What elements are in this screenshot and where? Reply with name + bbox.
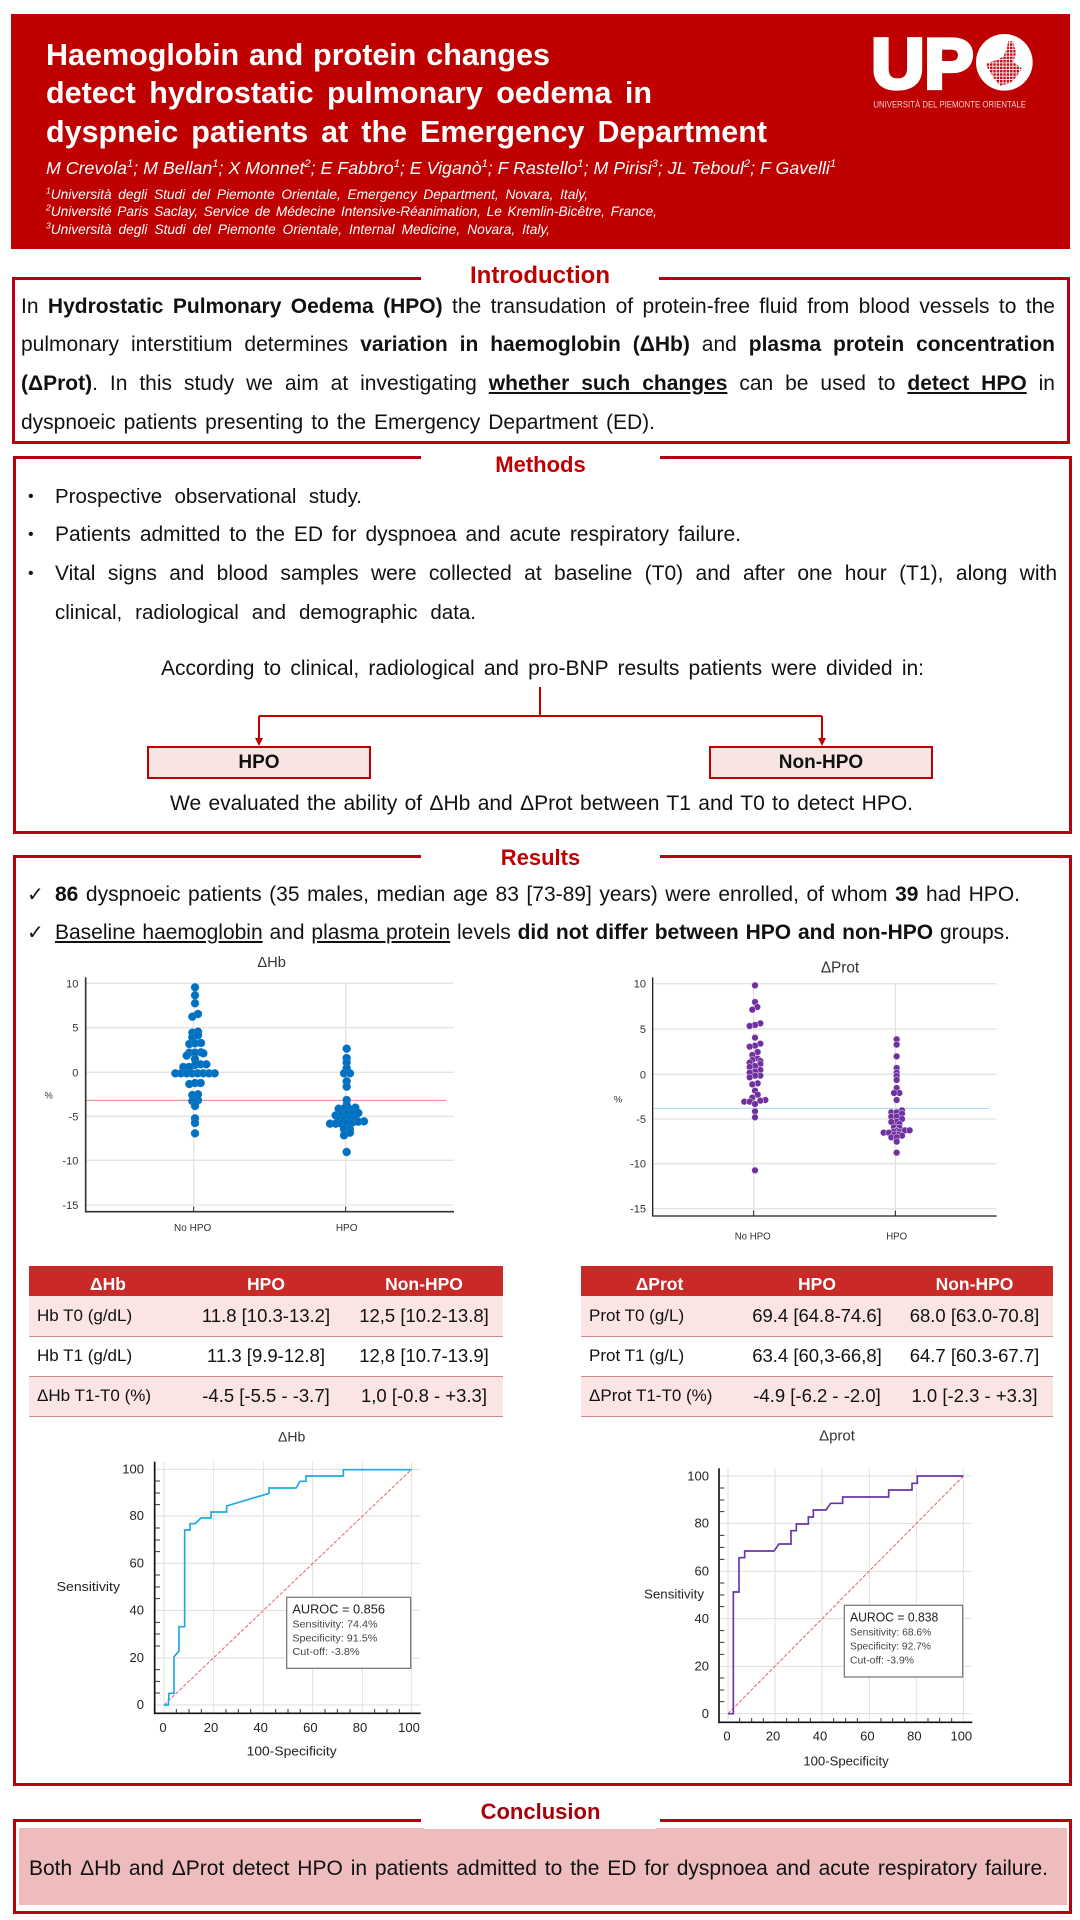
- chart: ROC curve delta Prot: 20: [766, 1729, 780, 1744]
- affiliations: [46, 185, 657, 237]
- chart: ROC curve delta Hb: 80: [353, 1720, 367, 1735]
- chart: ROC curve delta Prot: 100-Specificity: [803, 1754, 889, 1768]
- methods bullet list: •: [28, 488, 34, 505]
- chart title: delta Hb ROC: ΔHb: [278, 1429, 306, 1445]
- chart: ROC curve delta Prot: 20: [695, 1659, 709, 1674]
- table: delta Prot: [581, 1266, 1053, 1417]
- chart: dot plot delta Prot: 10: [634, 979, 646, 991]
- results check list: 86 dyspnoeic patients (35 males, median age 83 [73-89] years) were enrolled, of whom 39 had HPO.: [55, 883, 1020, 906]
- callout: AUROC Prot: Sensitivity: 68.6%: [850, 1628, 932, 1639]
- results check list: [27, 883, 1020, 944]
- chart: dot plot delta Hb: 5: [72, 1023, 78, 1035]
- methods bullet list: Vital signs and blood samples were collected at baseline (T0) and after one hour (T1), along with: [55, 562, 1057, 585]
- results check list: ✓: [27, 884, 44, 906]
- methods bullet list: Prospective observational study.: [55, 485, 362, 508]
- chart: ROC curve delta Hb: 40: [253, 1720, 268, 1735]
- chart: dot plot delta Hb: 0: [72, 1067, 78, 1079]
- box: HPO: HPO: [238, 752, 280, 773]
- chart: ROC curve delta Prot: 60: [695, 1564, 709, 1579]
- table: delta Hb: 1,0 [-0.8 - +3.3]: [361, 1385, 487, 1406]
- chart: dot plot delta Prot: 0: [640, 1069, 646, 1081]
- curve: delta Hb ROC: [164, 1470, 412, 1705]
- curve: delta Prot ROC: [728, 1476, 963, 1714]
- arrows: flow split: [255, 687, 826, 746]
- panel: conclusion: [13, 1799, 1072, 1914]
- chart: dot plot delta Hb: No HPO: [174, 1223, 212, 1234]
- table: delta Hb: ΔHb: [90, 1274, 126, 1294]
- chart: dot plot delta Hb: -15: [62, 1200, 78, 1212]
- chart: ROC curve delta Hb: 100: [122, 1461, 144, 1476]
- chart: ROC curve delta Hb: 80: [130, 1508, 144, 1523]
- chart: ROC curve delta Hb: 20: [130, 1650, 144, 1665]
- chart: dot plot delta Hb: -5: [69, 1111, 78, 1123]
- callout: AUROC Prot: Cut-off: -3.9%: [850, 1656, 914, 1667]
- chart: ROC curve delta Hb: Sensitivity: [57, 1580, 121, 1594]
- authors: M Crevola1; M Bellan1; X Monnet2; E Fabbro1; E Viganò1; F Rastello1; M Pirisi3; JL Teboul2; F Gavelli1: [46, 158, 836, 178]
- chart: ROC curve delta Hb: 0: [159, 1720, 167, 1735]
- intro text: pulmonary interstitium determines variation in haemoglobin (ΔHb) and plasma protein concentration: [21, 333, 1055, 356]
- methods bullet list: clinical, radiological and demographic data.: [55, 601, 476, 624]
- table: delta Hb: Hb T1 (g/dL): [37, 1346, 132, 1365]
- callout: AUROC Prot: [844, 1605, 963, 1677]
- chart: ROC curve delta Prot: 40: [813, 1729, 827, 1744]
- logo: UPO: UNIVERSITÀ DEL PIEMONTE ORIENTALE: [873, 100, 1026, 110]
- methods bullet list: •: [28, 565, 34, 582]
- chart: dot plot delta Prot: 5: [640, 1024, 646, 1036]
- table: delta Hb: 12,8 [10.7-13.9]: [359, 1345, 489, 1366]
- chart: ROC curve delta Hb: 60: [130, 1555, 144, 1570]
- panel: methods: [13, 452, 1072, 834]
- table: delta Prot: Prot T0 (g/L): [589, 1306, 684, 1325]
- results check list: Baseline haemoglobin and plasma protein levels did not differ between HPO and non-HPO groups.: [55, 921, 1010, 944]
- chart title: delta Prot: ΔProt: [821, 960, 860, 977]
- chart: dot plot delta Prot: HPO: [886, 1232, 908, 1243]
- chart: dot plot delta Prot: No HPO: [735, 1232, 771, 1243]
- table: delta Hb: HPO: [247, 1274, 285, 1294]
- table: delta Prot: -4.9 [-6.2 - -2.0]: [753, 1385, 881, 1406]
- box: Non-HPO: Non-HPO: [779, 752, 863, 773]
- table: delta Prot: Non-HPO: [936, 1274, 1013, 1294]
- table: delta Hb: 11.8 [10.3-13.2]: [202, 1305, 330, 1326]
- title: detect hydrostatic pulmonary oedema in: [46, 76, 652, 110]
- methods bullet list: [28, 485, 1057, 624]
- callout: AUROC Hb: [287, 1597, 411, 1668]
- callout: AUROC Hb: Sensitivity: 74.4%: [292, 1619, 378, 1630]
- table: delta Hb: ΔHb T1-T0 (%): [37, 1386, 151, 1405]
- conclusion text: Both ΔHb and ΔProt detect HPO in patients admitted to the ED for dyspnoea and acute respiratory failure.: [29, 1857, 1048, 1880]
- table: delta Hb: Non-HPO: [385, 1274, 463, 1294]
- intro text: dyspnoeic patients presenting to the Emergency Department (ED).: [21, 411, 655, 434]
- table: delta Prot: ΔProt T1-T0 (%): [589, 1386, 712, 1405]
- table: delta Prot: 64.7 [60.3-67.7]: [910, 1345, 1039, 1366]
- heading: methods: Methods: [495, 452, 586, 477]
- title: [46, 38, 767, 149]
- chart: ROC curve delta Prot: 0: [723, 1729, 731, 1744]
- callout: AUROC Prot: AUROC = 0.838: [850, 1610, 938, 1624]
- box: Non-HPO: [709, 746, 933, 779]
- chart: dot plot delta Prot: [614, 960, 997, 1243]
- table: delta Hb: Hb T0 (g/dL): [37, 1306, 132, 1325]
- panel: introduction: [12, 262, 1070, 444]
- dots: No HPO and HPO groups: [171, 983, 368, 1156]
- intro text: (ΔProt). In this study we aim at investigating whether such changes can be used to detect HPO in: [21, 372, 1055, 395]
- chart: dot plot delta Prot: %: [614, 1094, 622, 1104]
- results check list: ✓: [27, 922, 44, 944]
- chart: ROC curve delta Hb: 60: [303, 1720, 318, 1735]
- methods bullet list: Patients admitted to the ED for dyspnoea and acute respiratory failure.: [55, 523, 741, 546]
- chart: ROC curve delta Prot: 40: [695, 1611, 709, 1626]
- chart: ROC curve delta Hb: 20: [204, 1720, 218, 1735]
- chart: dot plot delta Prot: -10: [630, 1159, 646, 1171]
- table: delta Prot: 69.4 [64.8-74.6]: [752, 1305, 882, 1326]
- text: group division: According to clinical, radiological and pro-BNP results patients were divided in:: [161, 657, 924, 680]
- chart: ROC curve delta Hb: 100: [398, 1720, 420, 1735]
- heading: conclusion: Conclusion: [481, 1799, 600, 1824]
- table: delta Prot: 68.0 [63.0-70.8]: [910, 1305, 1039, 1326]
- chart: dot plot delta Hb: HPO: [336, 1223, 358, 1234]
- chart: dot plot delta Hb: 10: [66, 978, 78, 990]
- chart: ROC curve delta Prot: 0: [702, 1706, 709, 1721]
- chart: ROC curve delta Prot: 80: [695, 1516, 709, 1531]
- heading: introduction: Introduction: [470, 262, 610, 289]
- methods bullet list: •: [28, 526, 34, 543]
- table: delta Prot: 1.0 [-2.3 - +3.3]: [912, 1385, 1037, 1406]
- chart: dot plot delta Hb: %: [45, 1090, 53, 1100]
- chart: ROC curve delta Hb: 40: [130, 1602, 144, 1617]
- chart: dot plot delta Prot: -15: [630, 1204, 646, 1216]
- title: Haemoglobin and protein changes: [46, 38, 550, 72]
- title: dyspneic patients at the Emergency Department: [46, 115, 767, 149]
- table: delta Prot: ΔProt: [636, 1274, 683, 1294]
- panel: results: [13, 845, 1072, 1786]
- chart: ROC curve delta Hb: 100-Specificity: [247, 1744, 337, 1758]
- chart: ROC curve delta Prot: [644, 1428, 972, 1768]
- callout: AUROC Hb: AUROC = 0.856: [292, 1602, 385, 1616]
- intro text: In Hydrostatic Pulmonary Oedema (HPO) the transudation of protein-free fluid from blood vessels to the: [21, 295, 1055, 318]
- chart: ROC curve delta Prot: 100: [950, 1729, 972, 1744]
- callout: AUROC Hb: Specificity: 91.5%: [292, 1633, 378, 1644]
- chart title: delta Hb: ΔHb: [257, 955, 286, 971]
- chart: ROC curve delta Prot: 60: [860, 1729, 875, 1744]
- callout: AUROC Hb: Cut-off: -3.8%: [292, 1647, 360, 1658]
- affiliations: 3Università degli Studi del Piemonte Orientale, Internal Medicine, Novara, Italy,: [46, 220, 550, 237]
- affiliations: 1Università degli Studi del Piemonte Orientale, Emergency Department, Novara, Italy,: [46, 185, 588, 202]
- logo: UPO: [871, 24, 1033, 110]
- box: HPO: [147, 746, 371, 779]
- chart: dot plot delta Hb: -10: [62, 1155, 78, 1167]
- table: delta Prot: HPO: [798, 1274, 836, 1294]
- chart: dot plot delta Hb: [44, 955, 454, 1234]
- table: delta Hb: 12,5 [10.2-13.8]: [359, 1305, 489, 1326]
- table: delta Prot: 63.4 [60,3-66,8]: [752, 1345, 882, 1366]
- chart: ROC curve delta Prot: 80: [907, 1729, 922, 1744]
- intro text: [21, 295, 1055, 434]
- affiliations: 2Université Paris Saclay, Service de Médecine Intensive-Réanimation, Le Kremlin-Bicêtre, France,: [46, 202, 657, 219]
- table: delta Hb: [29, 1266, 503, 1417]
- dots: No HPO and HPO groups: [741, 982, 913, 1174]
- chart: ROC curve delta Hb: 0: [137, 1697, 144, 1712]
- header banner: [11, 14, 1070, 249]
- conclusion fill box: [19, 1828, 1067, 1905]
- heading: results: Results: [501, 845, 580, 870]
- text: evaluation: We evaluated the ability of ΔHb and ΔProt between T1 and T0 to detect HPO.: [170, 792, 913, 815]
- logo: UPO: UP: [871, 24, 973, 103]
- chart: dot plot delta Prot: -5: [636, 1114, 646, 1126]
- table: delta Prot: Prot T1 (g/L): [589, 1346, 684, 1365]
- table: delta Hb: -4.5 [-5.5 - -3.7]: [202, 1385, 330, 1406]
- chart: ROC curve delta Prot: 100: [687, 1468, 709, 1483]
- chart: ROC curve delta Hb: [57, 1429, 421, 1758]
- callout: AUROC Prot: Specificity: 92.7%: [850, 1642, 931, 1653]
- chart title: delta prot ROC: Δprot: [819, 1428, 856, 1445]
- chart: ROC curve delta Prot: Sensitivity: [644, 1588, 705, 1602]
- table: delta Hb: 11.3 [9.9-12.8]: [207, 1345, 325, 1366]
